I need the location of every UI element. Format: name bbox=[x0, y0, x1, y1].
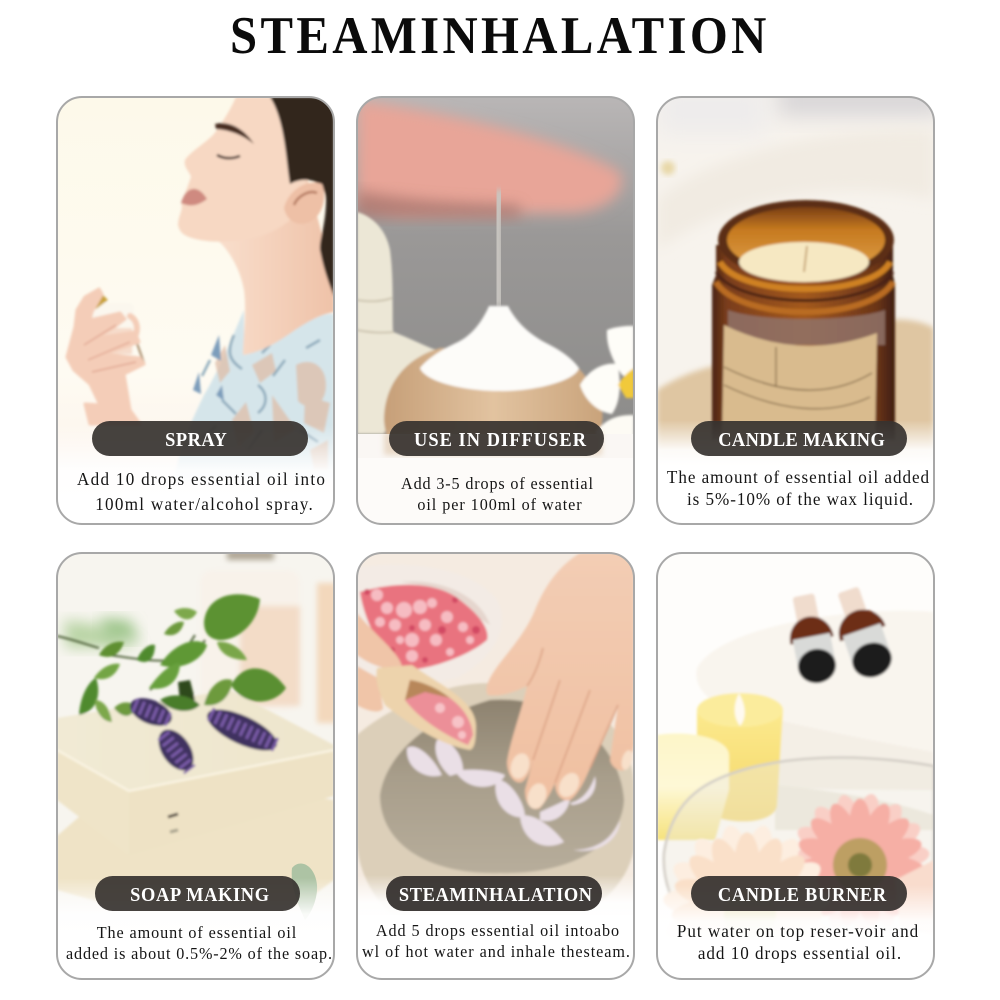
panel: use in diffuser bbox=[357, 97, 634, 524]
title: STEAMINHALATION bbox=[230, 7, 767, 65]
description bbox=[677, 921, 918, 963]
label pill: SPRAY bbox=[165, 429, 227, 451]
green leaf on soap bbox=[292, 864, 317, 912]
label pill: CANDLE MAKING bbox=[718, 429, 885, 451]
description: add 10 drops essential oil. bbox=[698, 943, 901, 963]
lavender bbox=[126, 693, 282, 777]
bottom fade bbox=[358, 434, 633, 458]
diffuser base bbox=[382, 346, 604, 434]
flowers bbox=[646, 782, 942, 1000]
brow, eye, lips bbox=[181, 123, 254, 205]
label pill bbox=[92, 421, 308, 456]
right hand bbox=[486, 553, 634, 811]
card border bbox=[357, 553, 634, 979]
description: wl of hot water and inhale thesteam. bbox=[362, 942, 630, 961]
panel: soap making bbox=[57, 550, 337, 979]
leaves bbox=[57, 594, 286, 722]
bottom fade bbox=[58, 882, 333, 930]
bottom fade bbox=[657, 885, 934, 945]
card border bbox=[657, 553, 934, 979]
label pill: USE IN DIFFUSER bbox=[414, 429, 587, 451]
card border bbox=[57, 97, 334, 524]
card border bbox=[57, 553, 334, 979]
burlap bbox=[657, 319, 934, 460]
petals bbox=[407, 740, 620, 851]
lace top bbox=[179, 312, 333, 466]
candles bbox=[657, 693, 783, 840]
description: added is about 0.5%-2% of the soap. bbox=[66, 944, 332, 963]
card border bbox=[357, 97, 634, 524]
bottles bbox=[788, 586, 894, 685]
jar bbox=[712, 200, 895, 440]
perfume and hand bbox=[67, 289, 144, 424]
blurred hand bbox=[357, 100, 622, 215]
label pill bbox=[691, 421, 907, 456]
label pill bbox=[386, 876, 602, 911]
lower soap bbox=[57, 594, 334, 905]
description: is 5%-10% of the wax liquid. bbox=[687, 489, 913, 509]
label pill: SOAP MAKING bbox=[130, 884, 269, 906]
label pill: CANDLE BURNER bbox=[718, 884, 887, 906]
diffuser cap bbox=[420, 306, 579, 391]
panel: steam inhalation bbox=[357, 553, 634, 979]
label pill bbox=[691, 876, 907, 911]
flower bbox=[578, 324, 633, 434]
description: oil per 100ml of water bbox=[417, 495, 582, 514]
bottom fade bbox=[358, 878, 633, 915]
description: Add 3-5 drops of essential bbox=[401, 474, 593, 493]
face bbox=[178, 97, 310, 242]
description: The amount of essential oil added bbox=[667, 467, 929, 487]
panel: candle burner bbox=[646, 553, 942, 1000]
description: Add 5 drops essential oil intoabo bbox=[376, 921, 619, 940]
description: Add 10 drops essential oil into bbox=[77, 469, 325, 489]
label pill bbox=[389, 421, 604, 456]
mist bbox=[497, 190, 500, 306]
bottom fade bbox=[58, 432, 333, 498]
bottom fade bbox=[658, 422, 933, 465]
left fingers bbox=[357, 613, 402, 711]
description bbox=[362, 921, 630, 961]
hair bbox=[270, 97, 334, 297]
glass bowl bbox=[664, 757, 934, 930]
upper soap bbox=[57, 750, 129, 855]
salt bowl bbox=[360, 584, 488, 669]
card border bbox=[657, 97, 934, 524]
label pill: STEAMINHALATION bbox=[399, 884, 592, 906]
description bbox=[401, 474, 593, 514]
ear bbox=[284, 182, 324, 224]
description bbox=[66, 923, 332, 963]
description: The amount of essential oil bbox=[97, 923, 297, 942]
label pill bbox=[95, 876, 300, 911]
panel: candle making bbox=[657, 85, 945, 524]
description bbox=[77, 469, 325, 514]
description: Put water on top reser-voir and bbox=[677, 921, 918, 941]
panel: spray bbox=[57, 97, 334, 524]
bottle bbox=[224, 554, 333, 726]
description bbox=[667, 467, 929, 509]
towels bbox=[696, 611, 934, 752]
description: 100ml water/alcohol spray. bbox=[95, 494, 313, 514]
stone bowl bbox=[357, 683, 634, 920]
scoop bbox=[376, 665, 476, 750]
pouch bbox=[357, 212, 438, 434]
neck bbox=[215, 170, 334, 355]
